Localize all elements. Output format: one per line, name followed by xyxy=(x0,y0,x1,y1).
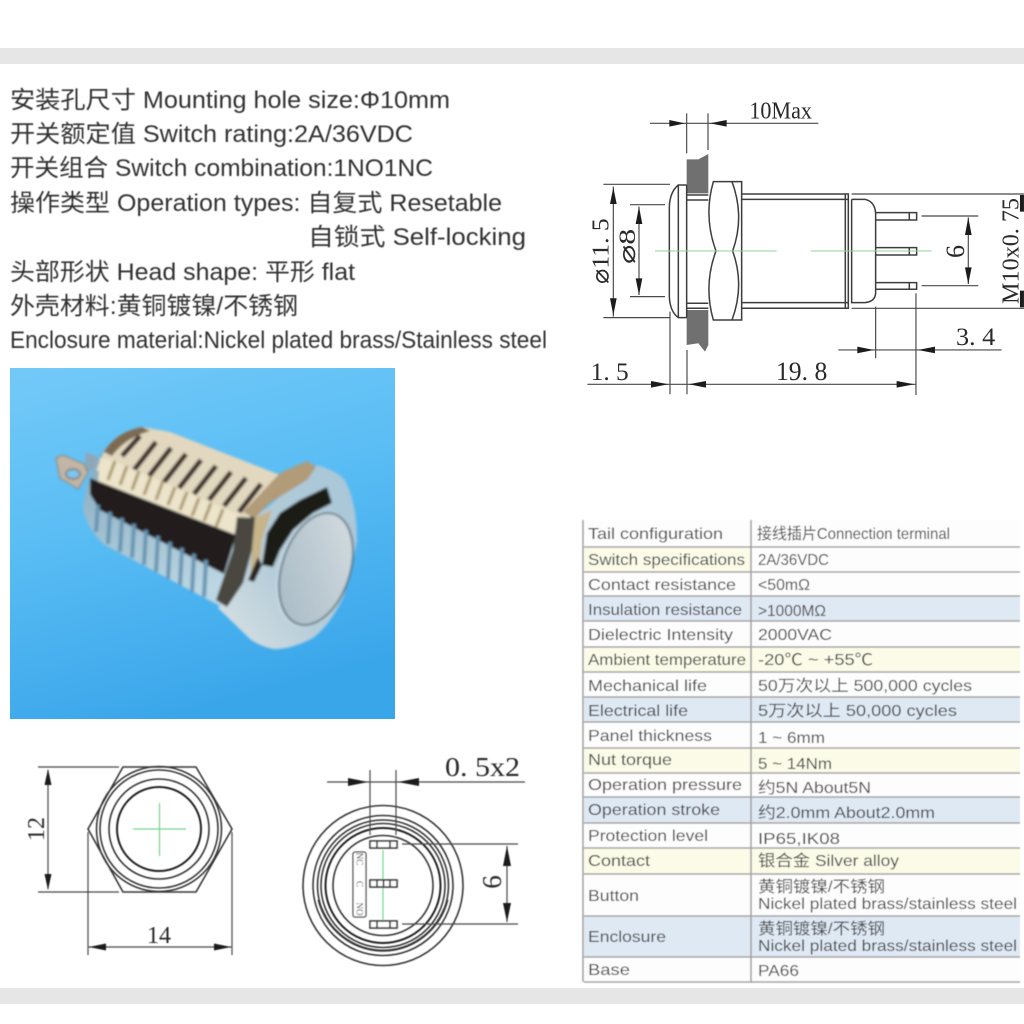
dimension: 1.5 xyxy=(587,312,916,394)
dimension: pin spacing 6: 6 xyxy=(941,245,970,258)
contact markings NC C NO: NC xyxy=(354,853,364,865)
spec: switch rating: 开关额定值 Switch rating:2A/36VDC xyxy=(10,121,413,148)
dimension: M10x0.75 xyxy=(852,194,1024,308)
row: operation stroke: 约2.0mm About2.0mm xyxy=(758,804,935,822)
table grid lines xyxy=(583,520,1020,982)
row: switch specifications: Switch specifications xyxy=(588,552,745,569)
row: enclosure: Nickel plated brass/stainless steel xyxy=(758,938,1017,955)
specification text block xyxy=(10,87,547,354)
dimension: diameter 8 xyxy=(615,205,665,297)
row: panel thickness: Panel thickness xyxy=(588,728,712,745)
dimension: 3.4 xyxy=(838,293,1002,395)
row: protection level: Protection level xyxy=(588,828,708,845)
dimension: 3.4: 3. 4 xyxy=(956,323,996,351)
product photo on blue background xyxy=(10,368,395,719)
centre cross xyxy=(133,803,186,856)
switch outline xyxy=(669,182,917,320)
dimension: pin spacing 6 xyxy=(922,216,978,286)
dimension: 1.5: 1. 5 xyxy=(591,358,629,386)
row: dielectric intensity: 2000VAC xyxy=(758,627,832,644)
dimension: 6: 6 xyxy=(477,875,507,889)
rear view drawing with pins xyxy=(303,752,525,966)
bottom grey band xyxy=(0,988,1024,1004)
side view dimension drawing xyxy=(587,98,1024,395)
row: dielectric intensity: Dielectric Intensity xyxy=(588,627,733,644)
spec: enclosure material chinese: 外壳材料:黄铜镀镍/不锈钢 xyxy=(10,293,298,320)
spec: operation types resetable: 操作类型 Operation types: 自复式 Resetable xyxy=(10,190,502,217)
row: insulation resistance: Insulation resistance xyxy=(588,602,742,619)
row: ambient temperature: Ambient temperature xyxy=(588,652,746,669)
dimension: 6 xyxy=(402,844,518,924)
row: base: PA66 xyxy=(758,963,799,980)
row: nut torque: Nut torque xyxy=(588,752,672,769)
solder pins xyxy=(370,841,397,928)
row: mechanical life xyxy=(588,677,972,695)
dimension: 14 xyxy=(88,832,232,955)
row: insulation resistance xyxy=(588,602,826,620)
row: electrical life: Electrical life xyxy=(588,703,688,720)
row: button: Nickel plated brass/stainless steel xyxy=(758,896,1017,913)
icon: threaded body xyxy=(83,427,280,606)
icon: domed head rim xyxy=(218,465,357,649)
row: button: 黄铜镀镍/不锈钢 xyxy=(758,878,885,896)
row: enclosure: 黄铜镀镍/不锈钢 xyxy=(758,920,885,938)
spec: operation types self-locking: 自锁式 Self-locking xyxy=(308,224,526,251)
icon: hex nut xyxy=(216,461,332,607)
row: insulation resistance: >1000MΩ xyxy=(758,603,826,620)
row: operation pressure: 约5N About5N xyxy=(758,779,871,797)
row: operation pressure xyxy=(588,777,871,797)
dimension: 12 xyxy=(24,767,119,892)
specification table xyxy=(583,520,1020,982)
row: base xyxy=(588,962,799,980)
row: ambient temperature: -20℃ ~ +55℃ xyxy=(758,652,873,669)
row: enclosure: Enclosure xyxy=(588,929,666,946)
row: tail configuration: 接线插片Connection terminal xyxy=(757,525,950,543)
row: switch specifications: 2A/36VDC xyxy=(758,552,829,569)
dimension: diameter 11.5: ⌀11. 5 xyxy=(587,218,614,284)
front view drawing with hexagon xyxy=(24,766,232,955)
spec: switch combination: 开关组合 Switch combination:1NO1NC xyxy=(10,155,433,182)
dimension: 10Max xyxy=(650,98,818,153)
row: enclosure xyxy=(588,920,1017,955)
row: ambient temperature xyxy=(588,652,873,669)
row: contact resistance: Contact resistance xyxy=(588,577,736,594)
row: contact resistance: <50mΩ xyxy=(758,577,810,594)
spec: head shape: 头部形状 Head shape: 平形 flat xyxy=(10,259,355,286)
icon: solder terminal xyxy=(56,452,98,489)
row: nut torque xyxy=(588,752,832,773)
row: tail configuration: Tail configuration xyxy=(588,526,723,543)
row: operation stroke xyxy=(588,802,935,822)
row: operation pressure: Operation pressure xyxy=(588,777,742,794)
dimension: M10x0.75: M10x0. 75 xyxy=(998,198,1024,304)
hexagon nut outline xyxy=(88,767,232,892)
dimension: 12: 12 xyxy=(24,817,50,841)
row: nut torque: 5 ~ 14Nm xyxy=(758,756,832,773)
row: contact: 银合金 Silver alloy xyxy=(758,852,899,870)
contact markings NC C NO: NO xyxy=(354,902,364,916)
concentric rear rings xyxy=(303,806,463,966)
row: tail configuration xyxy=(588,525,950,543)
spec: mounting hole size: 安装孔尺寸 Mounting hole size:Φ10mm xyxy=(10,87,450,114)
contact markings NC C NO: C xyxy=(354,881,364,887)
dimension: 19.8 xyxy=(689,357,914,388)
dimension: 14: 14 xyxy=(147,923,171,949)
dimension: 10Max: 10Max xyxy=(749,98,813,125)
row: electrical life: 5万次以上 50,000 cycles xyxy=(758,702,957,720)
row: mechanical life: 50万次以上 500,000 cycles xyxy=(758,677,972,695)
row: button xyxy=(588,878,1017,913)
spec: enclosure material english: Enclosure material:Nickel plated brass/Stainless steel xyxy=(10,327,547,354)
panel cross-section xyxy=(687,154,708,352)
row: base: Base xyxy=(588,962,630,979)
centre line xyxy=(382,850,384,920)
dimension: 0.5x2: 0. 5x2 xyxy=(445,752,520,782)
row: contact: Contact xyxy=(588,853,651,870)
dimension: 0.5x2 xyxy=(327,752,525,835)
dimension: diameter 8: ⌀8 xyxy=(615,229,641,264)
row: mechanical life: Mechanical life xyxy=(588,678,707,695)
row backgrounds xyxy=(584,520,1020,982)
icon: flat button face xyxy=(262,501,368,637)
row: switch specifications xyxy=(588,552,829,569)
row: panel thickness xyxy=(588,728,825,747)
row: protection level xyxy=(588,828,840,848)
row: protection level: IP65,IK08 xyxy=(758,831,840,848)
row: contact resistance xyxy=(588,577,810,594)
row: operation stroke: Operation stroke xyxy=(588,802,720,819)
top grey band xyxy=(0,48,1024,64)
concentric button rings xyxy=(96,766,222,892)
row: contact xyxy=(588,852,899,870)
row: electrical life xyxy=(588,702,957,720)
dimension: 19.8: 19. 8 xyxy=(776,357,827,386)
row: panel thickness: 1 ~ 6mm xyxy=(758,730,825,747)
row: button: Button xyxy=(588,888,639,905)
dimension: diameter 11.5 xyxy=(587,184,670,318)
contact markings NC C NO xyxy=(353,852,366,917)
row: dielectric intensity xyxy=(588,627,832,644)
centre line xyxy=(655,249,932,252)
